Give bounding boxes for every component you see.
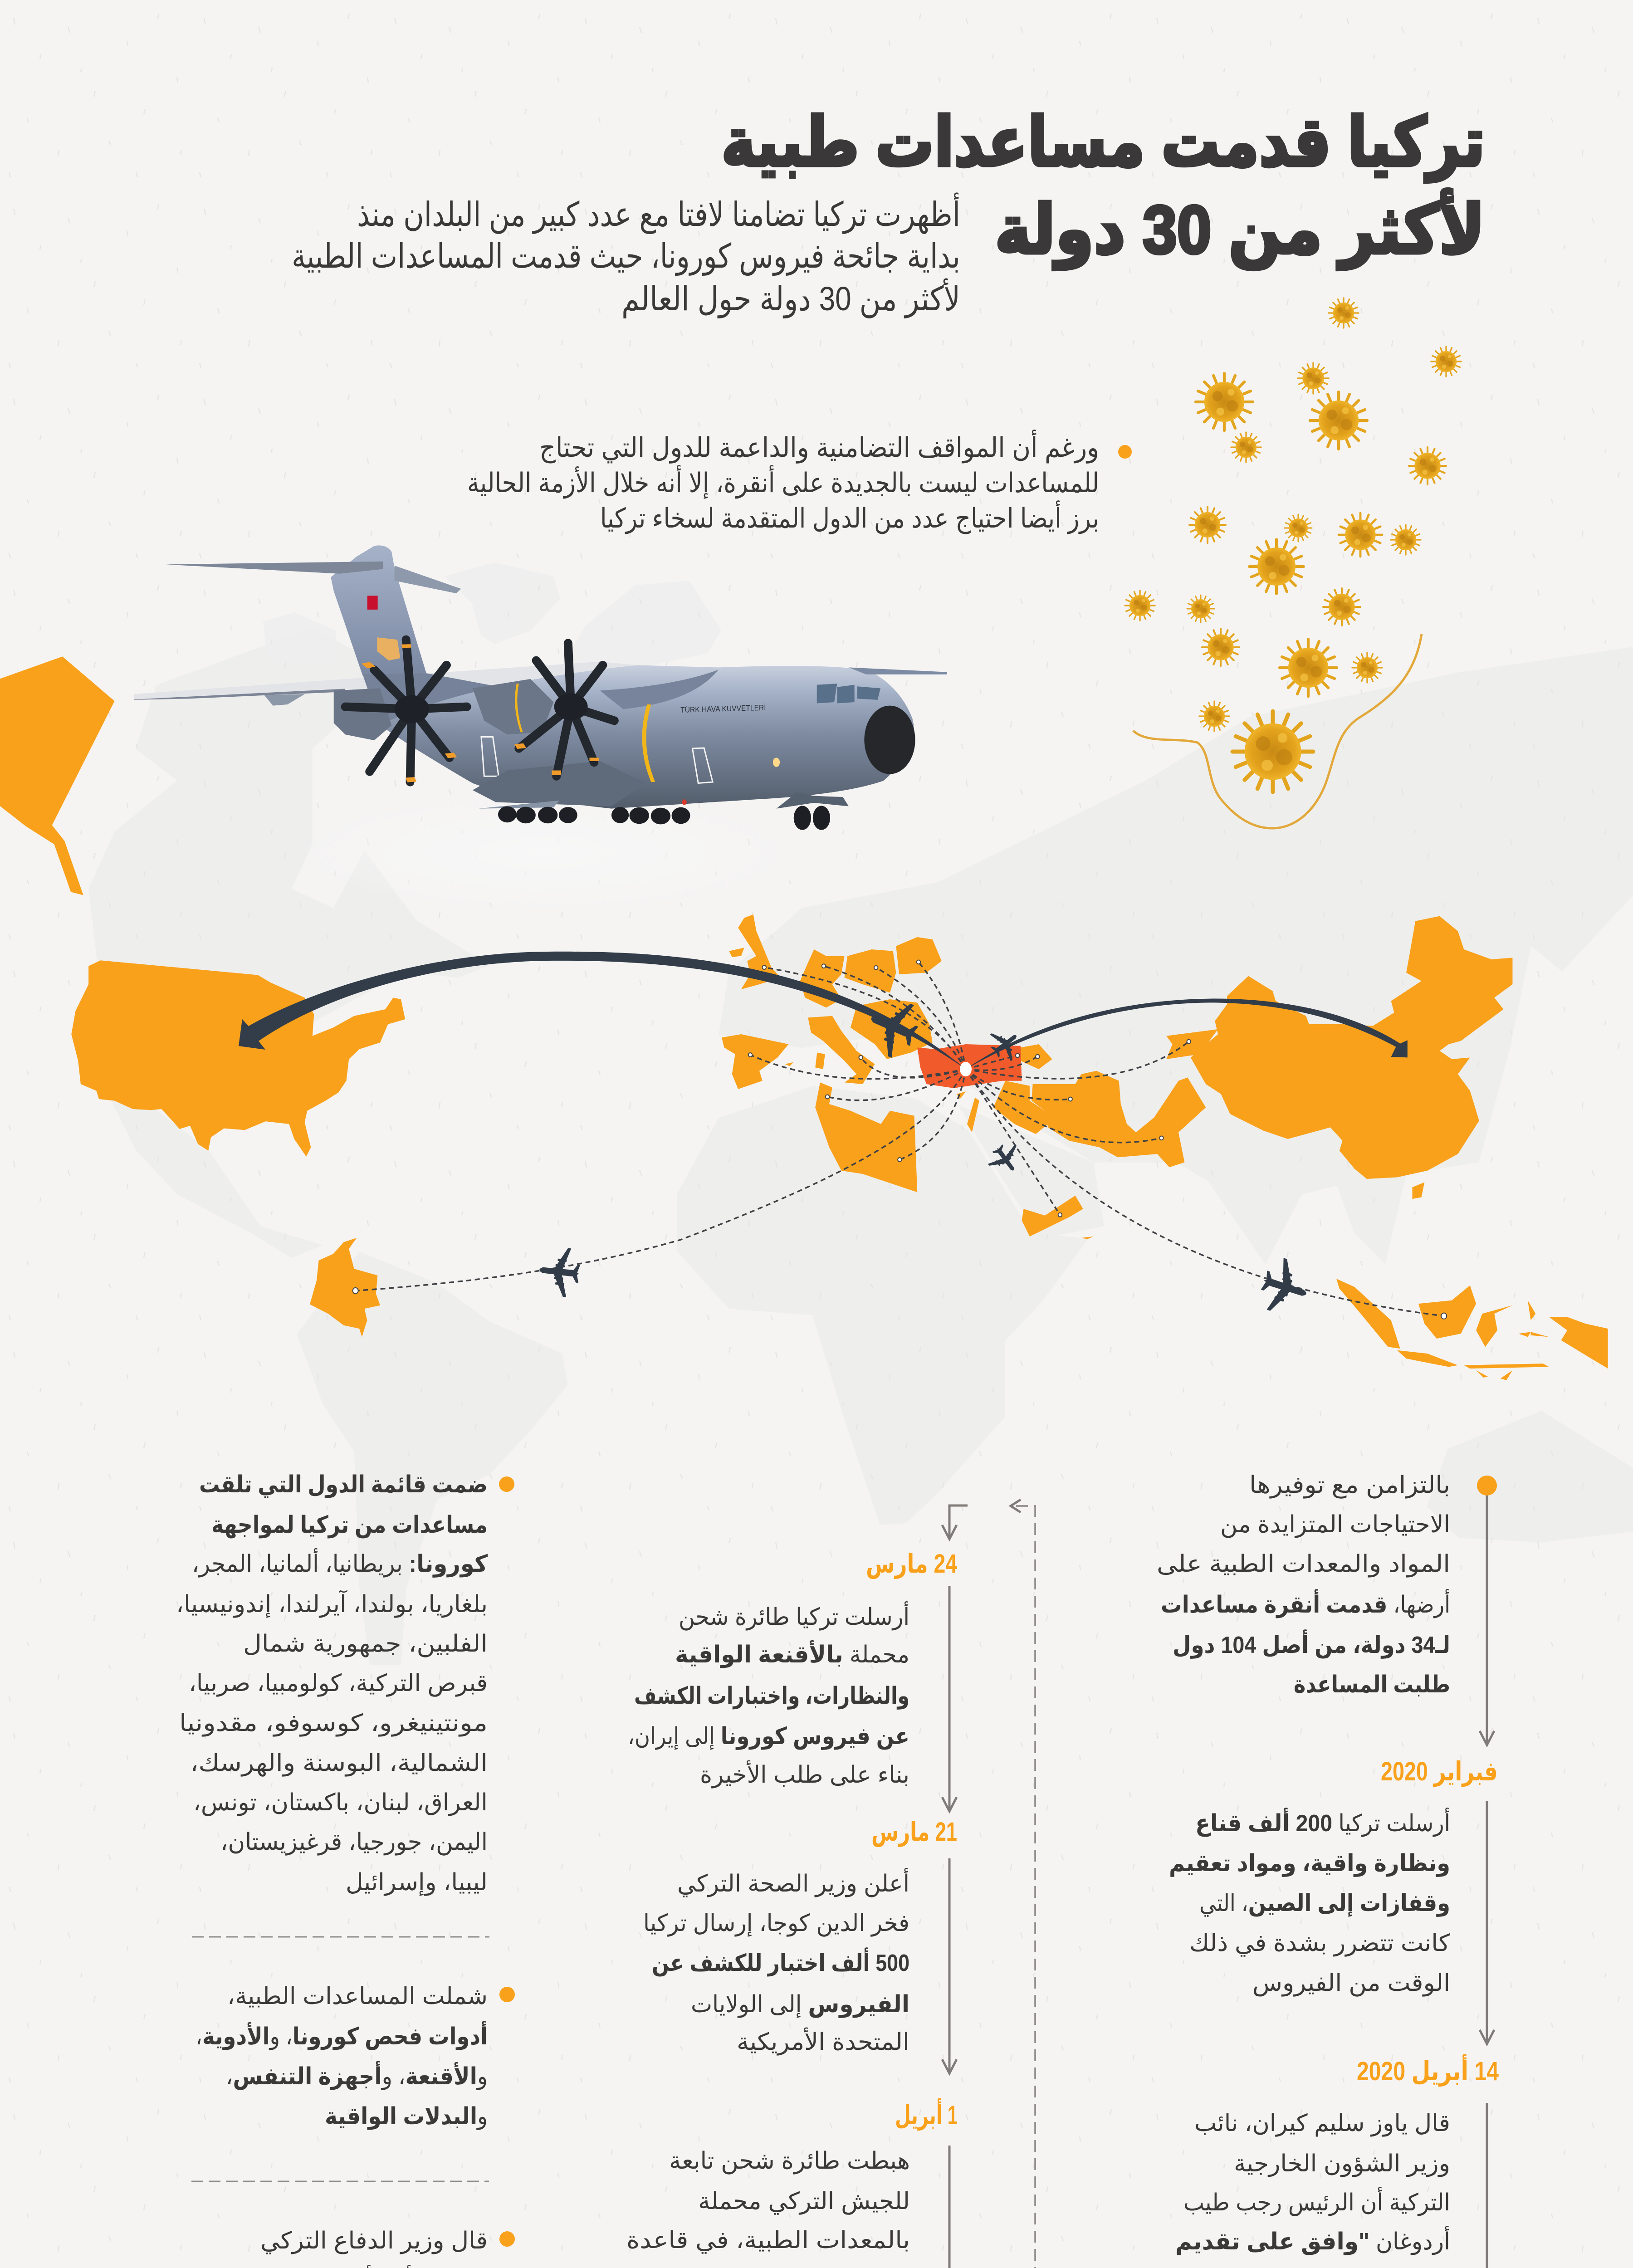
map: route end dots	[353, 960, 1447, 1319]
middle column: 21 March: الفيروس إلى الولايات	[691, 1991, 909, 2018]
left column: bullet list: قبرص التركية، كولومبيا، صربيا،	[189, 1670, 488, 1697]
middle column: 24 March: والنظارات، واختبارات الكشف	[634, 1683, 909, 1710]
middle column: 21 March: 500 ألف اختبار للكشف عن	[652, 1947, 909, 1977]
left column: bullet list: والأقنعة، وأجهزة التنفس،	[226, 2061, 488, 2090]
right column: February 2020: فبراير 2020	[1381, 1757, 1498, 1787]
title: لأكثر من 30 دولة	[995, 189, 1485, 270]
right column: introduction: لـ34 دولة، من أصل 104 دول	[1173, 1629, 1450, 1659]
right column: introduction: المواد والمعدات الطبية على	[1157, 1551, 1450, 1578]
intro text	[292, 192, 960, 318]
middle column: 21 March: أعلن وزير الصحة التركي	[677, 1868, 909, 1897]
middle column: 24 March: عن فيروس كورونا إلى إيران،	[628, 1723, 909, 1750]
faded world map	[88, 628, 1633, 1665]
right column: introduction: طلبت المساعدة	[1294, 1672, 1450, 1698]
icon: plane toward China	[984, 1022, 1027, 1066]
left column: bullet list: العراق، لبنان، باكستان، تونس،	[193, 1789, 488, 1816]
arrow: Turkey to China	[966, 999, 1408, 1069]
left column: bullet list: كورونا: بريطانيا، ألمانيا، المجر،	[192, 1548, 488, 1578]
right column: 14 April 2020: أردوغان "وافق على تقديم	[1175, 2226, 1450, 2255]
right column: 14 April 2020: 14 أبريل 2020	[1357, 2054, 1499, 2087]
right column: February 2020: أرسلت تركيا 200 ألف قناع	[1195, 1808, 1450, 1837]
arrow: Turkey to United States	[239, 952, 966, 1069]
middle column: 21 March	[643, 1817, 957, 2056]
left column: bullet list: الشمالية، البوسنة والهرسك،	[190, 1750, 488, 1777]
middle column: 1 April	[621, 2098, 958, 2268]
middle column: 24 March: أرسلت تركيا طائرة شحن	[679, 1601, 909, 1631]
map: Alaska	[0, 656, 115, 895]
icon: plane toward Colombia	[537, 1246, 582, 1298]
second paragraph with bullet: ورغم أن المواقف التضامنية والداعمة للدول التي تحتاج	[539, 430, 1099, 464]
right column: February 2020: ونظارة واقية، ومواد تعقيم	[1169, 1850, 1450, 1877]
right column: February 2020: وقفازات إلى الصين، التي	[1199, 1890, 1450, 1917]
intro text: بداية جائحة فيروس كورونا، حيث قدمت المساعدات الطبية	[292, 237, 960, 276]
intro text: لأكثر من 30 دولة حول العالم	[621, 278, 960, 318]
middle column: 1 April: بالمعدات الطبية، في قاعدة	[626, 2227, 910, 2254]
middle column: 1 April: هبطت طائرة شحن تابعة	[669, 2148, 910, 2175]
left column: bullet list: بلغاريا، بولندا، آيرلندا، إندونيسيا،	[176, 1589, 488, 1618]
gold curve under viruses	[1133, 634, 1422, 828]
map: Europe, Middle East and Asia countries	[722, 914, 1608, 1380]
right column: February 2020: كانت تتضرر بشدة في ذلك	[1189, 1930, 1450, 1957]
title: تركيا قدمت مساعدات طبية	[721, 104, 1485, 182]
map: flight routes (dashed)	[356, 962, 1444, 1316]
left column: bullet list: قال وزير الدفاع التركي	[260, 2228, 488, 2254]
intro text: أظهرت تركيا تضامنا لافتا مع عدد كبير من البلدان منذ	[357, 192, 960, 234]
left column: bullet list: اليمن، جورجيا، قرغيزيستان،	[220, 1829, 488, 1856]
middle column: 24 March: بناء على طلب الأخيرة	[700, 1760, 909, 1789]
middle column: 24 March	[628, 1549, 957, 1789]
left column: bullet list: ضمت قائمة الدول التي تلقت	[199, 1471, 488, 1498]
right column: 14 April 2020	[1175, 2054, 1499, 2268]
middle column: 21 March: المتحدة الأمريكية	[737, 2027, 909, 2056]
second paragraph with bullet	[467, 430, 1132, 534]
left column: bullet list: ليبيا، وإسرائيل	[346, 1869, 488, 1896]
right column: 14 April 2020: وزير الشؤون الخارجية	[1234, 2151, 1450, 2177]
right column: introduction: بالتزامن مع توفيرها	[1249, 1472, 1450, 1499]
icon: plane toward Yemen	[983, 1138, 1027, 1180]
virus cluster illustration	[1125, 298, 1461, 792]
map: Turkey origin dot	[960, 1062, 972, 1076]
second paragraph with bullet: برز أيضا احتياج عدد من الدول المتقدمة لسخاء تركيا	[600, 500, 1099, 534]
left column: bullet list	[176, 1471, 515, 2268]
left column: bullet list: مونتينيغرو، كوسوفو، مقدونيا	[179, 1710, 488, 1737]
title	[721, 104, 1485, 270]
icon: plane toward Indonesia	[1256, 1254, 1315, 1320]
right column: February 2020	[1169, 1757, 1498, 1997]
left column: bullet list: شملت المساعدات الطبية،	[227, 1983, 488, 2009]
left column: bullet list: مساعدات من تركيا لمواجهة	[211, 1512, 488, 1539]
faded arctic islands	[263, 562, 721, 671]
right column: introduction: الاحتياجات المتزايدة من	[1220, 1511, 1450, 1538]
middle column: 21 March: فخر الدين كوجا، إرسال تركيا	[643, 1910, 909, 1937]
middle column: 1 April: 1 أبريل	[895, 2098, 958, 2131]
second paragraph with bullet: للمساعدات ليست بالجديدة على أنقرة، إلا أنه خلال الأزمة الحالية	[467, 465, 1099, 499]
right column: 14 April 2020: التركية أن الرئيس رجب طيب	[1183, 2187, 1450, 2216]
middle column: 1 April: للجيش التركي محملة	[698, 2188, 910, 2215]
right column: February 2020: الوقت من الفيروس	[1252, 1970, 1450, 1997]
left column: bullet list: أدوات فحص كورونا، والأدوية،	[196, 2021, 488, 2050]
plane reflection fade	[290, 794, 798, 912]
timeline connectors	[942, 1476, 1497, 2268]
map: United States	[71, 960, 405, 1157]
left column: bullet list: الفلبين، جمهورية شمال	[243, 1631, 488, 1657]
middle column: 24 March: محملة بالأقنعة الواقية	[675, 1640, 909, 1668]
left column: bullet list: والبدلات الواقية	[325, 2103, 488, 2130]
right column: introduction	[1157, 1472, 1450, 1698]
right column: introduction: أرضها، قدمت أنقرة مساعدات	[1161, 1589, 1450, 1618]
illustration: A400M cargo plane	[134, 545, 947, 830]
right column: 14 April 2020: قال ياوز سليم كيران، نائب	[1194, 2110, 1450, 2137]
illustration: A400M cargo plane: TÜRK HAVA KUVVETLERİ	[680, 703, 767, 714]
middle column: 21 March: 21 مارس	[871, 1817, 957, 1847]
map: Colombia	[310, 1238, 380, 1337]
middle column: 24 March: 24 مارس	[866, 1549, 957, 1579]
icon: plane toward United States	[860, 992, 925, 1063]
